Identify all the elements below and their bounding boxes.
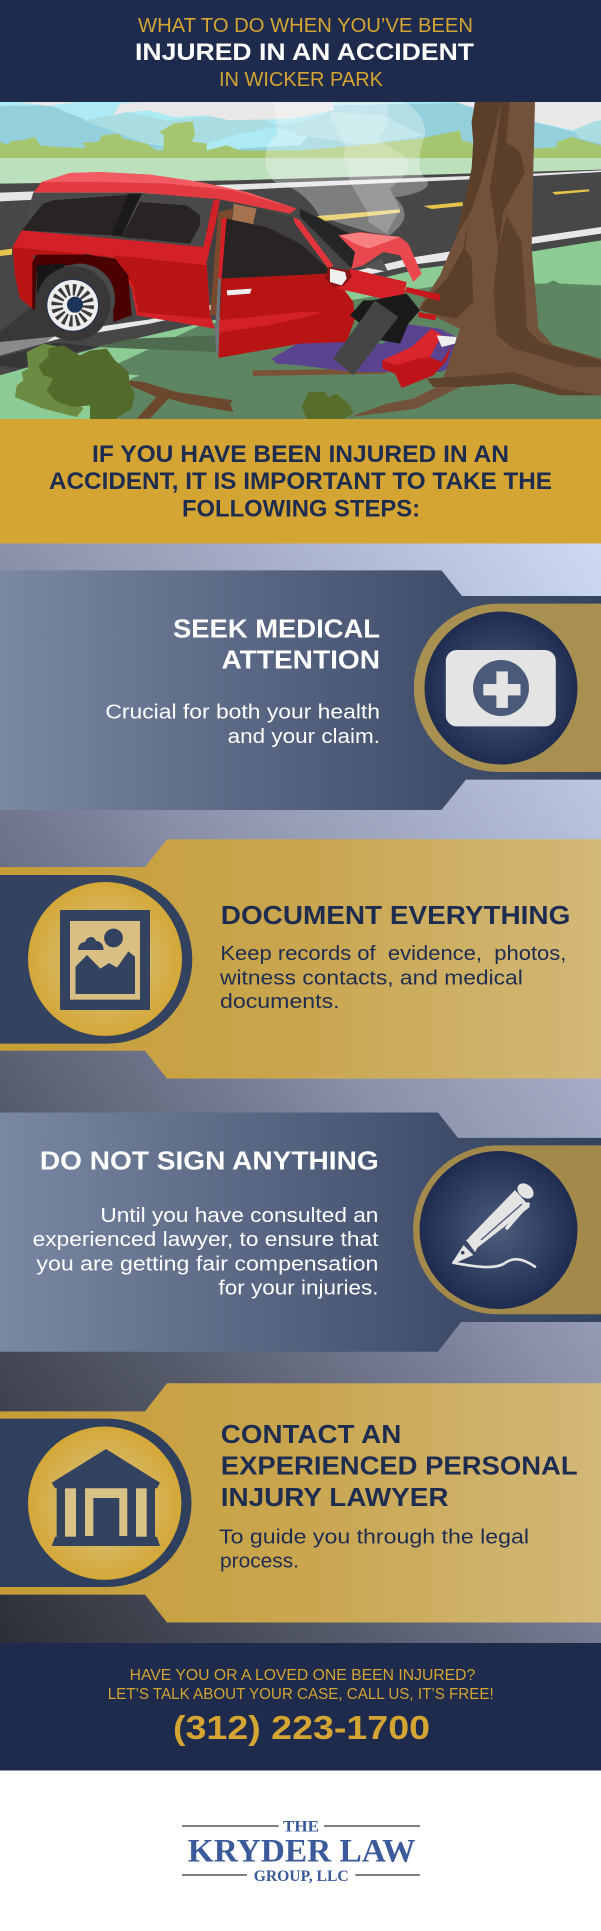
step 3 text: experienced lawyer, to ensure that — [33, 1229, 379, 1251]
open door — [215, 217, 355, 358]
step 3 text: you are getting fair compensation — [36, 1253, 378, 1275]
step 1 heading: ATTENTION — [222, 645, 380, 675]
step 4 text: process. — [220, 1550, 299, 1572]
step 1 heading: SEEK MEDICAL — [173, 614, 380, 644]
logo: The Kryder Law Group, LLC: KRYDER LAW — [188, 1834, 416, 1870]
illustration: crashed car against tree — [0, 102, 601, 419]
step 1 text — [105, 702, 380, 748]
step 4 heading: CONTACT AN — [221, 1419, 401, 1449]
step 4 text: To guide you through the legal — [219, 1527, 529, 1549]
step 3 text: Until you have consulted an — [100, 1205, 378, 1227]
icon: courthouse — [28, 1426, 181, 1580]
step 3 text: for your injuries. — [218, 1277, 378, 1299]
step 4 text — [219, 1527, 529, 1572]
gold capsule — [414, 604, 601, 772]
step 1 text: and your claim. — [228, 726, 380, 748]
navy capsule — [0, 1419, 192, 1587]
tree — [350, 102, 601, 417]
icon: picture — [28, 882, 182, 1036]
wheel — [36, 264, 115, 341]
step 2 text — [219, 943, 566, 1013]
intro text — [49, 441, 552, 522]
step 1 text: Crucial for both your health — [105, 702, 380, 724]
logo: The Kryder Law Group, LLC — [182, 1819, 420, 1885]
step 2 text: witness contacts, and medical — [219, 967, 523, 989]
step 4 heading — [221, 1419, 578, 1512]
steps background — [0, 544, 601, 1644]
step 3 heading: DO NOT SIGN ANYTHING — [40, 1145, 379, 1175]
step 4 heading: INJURY LAWYER — [221, 1482, 449, 1512]
step 4 heading: EXPERIENCED PERSONAL — [221, 1450, 578, 1480]
panel: step 2 document everything — [0, 839, 601, 1079]
gold capsule — [413, 1145, 601, 1314]
heading: location: IN WICKER PARK — [219, 69, 384, 91]
step 2 text: documents. — [220, 991, 340, 1013]
branch — [252, 369, 387, 376]
step 3 text — [33, 1205, 379, 1299]
icon: first aid kit — [424, 612, 578, 764]
road — [0, 170, 601, 375]
heading: what to do: WHAT TO DO WHEN YOU’VE BEEN — [138, 15, 473, 37]
call to action text: HAVE YOU OR A LOVED ONE BEEN INJURED? — [130, 1667, 475, 1684]
bushes — [15, 344, 353, 419]
panel: step 3 do not sign anything — [0, 1112, 601, 1352]
call to action text — [108, 1667, 494, 1703]
logo: The Kryder Law Group, LLC: GROUP, LLC — [254, 1868, 349, 1885]
intro text: FOLLOWING STEPS: — [182, 496, 420, 522]
intro text: IF YOU HAVE BEEN INJURED IN AN — [92, 441, 509, 468]
icon: pen signing — [420, 1151, 578, 1309]
navy capsule — [0, 875, 192, 1044]
step 2 heading: DOCUMENT EVERYTHING — [221, 900, 570, 930]
intro text: ACCIDENT, IT IS IMPORTANT TO TAKE THE — [49, 468, 552, 495]
car — [13, 172, 457, 388]
purple fluid — [272, 324, 460, 372]
panel: step 1 seek medical attention — [0, 570, 601, 810]
heading: injured in an accident: INJURED IN AN ACCIDENT — [135, 39, 474, 66]
phone number: (312) 223-1700 — [173, 1709, 430, 1746]
grass — [0, 240, 601, 419]
panel: intro band — [0, 419, 601, 544]
lower branch — [128, 380, 233, 419]
smoke — [265, 102, 428, 235]
panel: step 4 contact a lawyer — [0, 1383, 601, 1622]
logo: The Kryder Law Group, LLC: THE — [283, 1819, 319, 1836]
call to action text: LET’S TALK ABOUT YOUR CASE, CALL US, IT’S FREE! — [108, 1686, 494, 1703]
panel: header — [0, 0, 601, 103]
step 2 text: Keep records of evidence, photos, — [220, 943, 566, 965]
panel: call to action footer — [0, 1643, 601, 1770]
step 1 heading — [173, 614, 380, 675]
